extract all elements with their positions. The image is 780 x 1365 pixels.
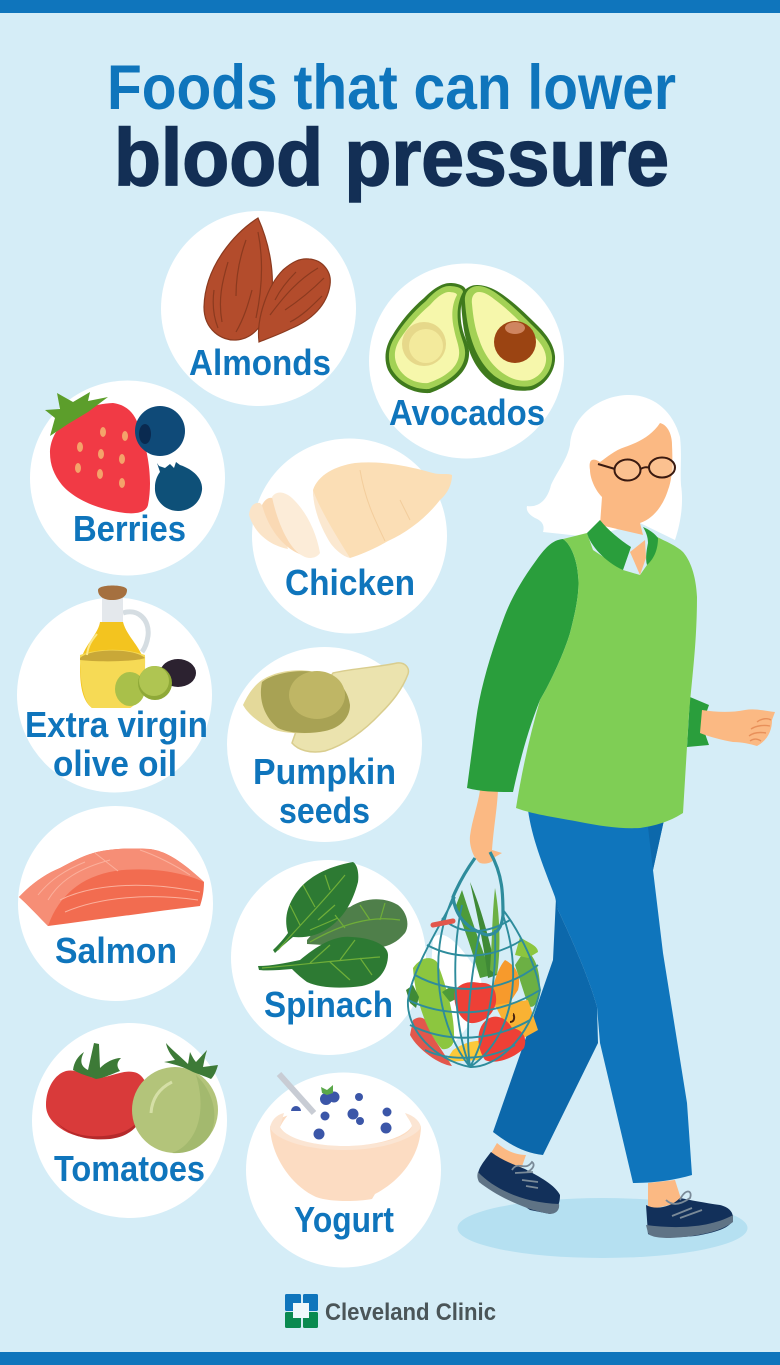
vest [516, 533, 697, 828]
icon: strawberry [45, 392, 150, 513]
shopping net bag [406, 852, 540, 1067]
label: Pumpkin seeds: seeds [279, 790, 370, 831]
glasses [598, 458, 675, 480]
label: Extra virgin olive oil: Extra virgin [25, 704, 208, 745]
icon: blueberries [135, 406, 202, 511]
panel: almonds [161, 211, 356, 406]
icon: spinach leaves [258, 862, 407, 988]
neck and face [590, 423, 672, 535]
panel: pumpkin seeds [227, 647, 422, 842]
icon: red tomato [46, 1043, 148, 1139]
title: blood pressure [114, 113, 669, 203]
right cuff [687, 697, 709, 747]
bag contents [406, 882, 540, 1066]
collar [587, 520, 658, 575]
left arm and hand [470, 790, 502, 864]
icon: oil bottle and olives [80, 586, 196, 708]
label: Extra virgin olive oil: olive oil [53, 743, 177, 784]
label: Avocados: Avocados [389, 392, 545, 433]
logo mark [285, 1294, 318, 1328]
label: Tomatoes: Tomatoes [54, 1148, 205, 1189]
logo: Cleveland Clinic [285, 1294, 496, 1328]
right hand [700, 709, 775, 746]
label: Berries: Berries [73, 508, 186, 549]
illustration: walking woman [406, 395, 775, 1258]
label: Pumpkin seeds [253, 751, 396, 831]
icon: almonds [204, 218, 330, 342]
hair [527, 395, 682, 540]
label: Salmon: Salmon [55, 930, 177, 971]
title: Foods that can lower [107, 53, 676, 123]
label: Yogurt: Yogurt [294, 1199, 394, 1240]
net [408, 897, 540, 1067]
label: Almonds: Almonds [189, 342, 331, 383]
panel: berries [30, 380, 225, 576]
icon: yogurt bowl [270, 1074, 421, 1201]
panel: extra virgin olive oil [17, 586, 212, 792]
title [107, 53, 676, 203]
red tag [433, 921, 453, 925]
ground shadow [458, 1198, 748, 1258]
front shoe [646, 1192, 733, 1238]
label: Extra virgin olive oil [25, 704, 208, 784]
panel: tomatoes [32, 1023, 227, 1218]
panel: spinach [231, 860, 426, 1055]
label: Pumpkin seeds: Pumpkin [253, 751, 396, 792]
panel: avocados [369, 264, 564, 458]
handles [453, 852, 503, 935]
panel: salmon [18, 806, 213, 1001]
label: Chicken: Chicken [285, 562, 415, 603]
icon: chicken breast [249, 462, 452, 558]
logo wordmark: Cleveland Clinic [325, 1299, 496, 1326]
icon: avocados [385, 283, 555, 393]
rear ankle [488, 1143, 526, 1172]
rear shoe [477, 1152, 560, 1214]
icon: salmon fillet [19, 848, 204, 926]
icon: green tomato [132, 1043, 218, 1153]
front trouser leg [528, 810, 692, 1183]
panel: chicken [249, 438, 452, 634]
icon: pumpkin seeds [243, 663, 408, 752]
front ankle [648, 1180, 682, 1210]
left sleeve [467, 539, 579, 792]
back trouser leg [493, 898, 598, 1155]
panel: yogurt [246, 1072, 441, 1268]
label: Spinach: Spinach [264, 984, 393, 1025]
